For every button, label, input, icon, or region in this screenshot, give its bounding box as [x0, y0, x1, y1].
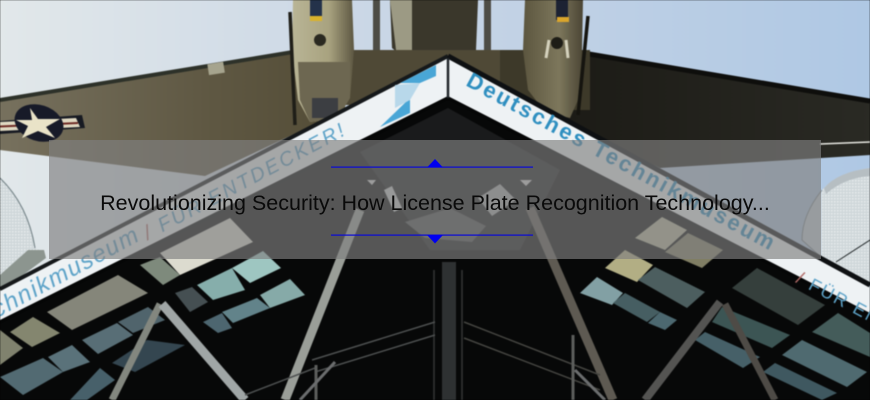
glass roof panes left	[0, 218, 305, 400]
right engine	[523, 0, 588, 118]
building interior	[0, 98, 870, 400]
title panel	[49, 140, 821, 259]
central fuselage	[340, 0, 540, 105]
glass roof panes right	[580, 217, 870, 400]
steel support columns	[112, 208, 775, 400]
ceiling under apex	[360, 108, 560, 250]
icon: star roundel	[0, 98, 85, 148]
top blue rule with triangle	[331, 159, 533, 168]
sign text: Deutsches Technikmuseum / Für Entdecker: Deutsches Technikmuseum	[463, 67, 781, 256]
left wing with roundel	[0, 50, 345, 176]
right wing	[500, 50, 870, 168]
museum roof band left: / FÜR ENTDECKER!	[138, 119, 351, 245]
title text: Revolutionizing Security: How License Plate Recognition Technology...	[100, 191, 770, 215]
museum roof band left	[0, 56, 448, 323]
right building	[802, 168, 870, 286]
bottom blue rule with triangle	[331, 234, 533, 244]
left building	[0, 178, 46, 292]
left engine	[290, 0, 354, 125]
museum roof band right	[448, 56, 870, 335]
